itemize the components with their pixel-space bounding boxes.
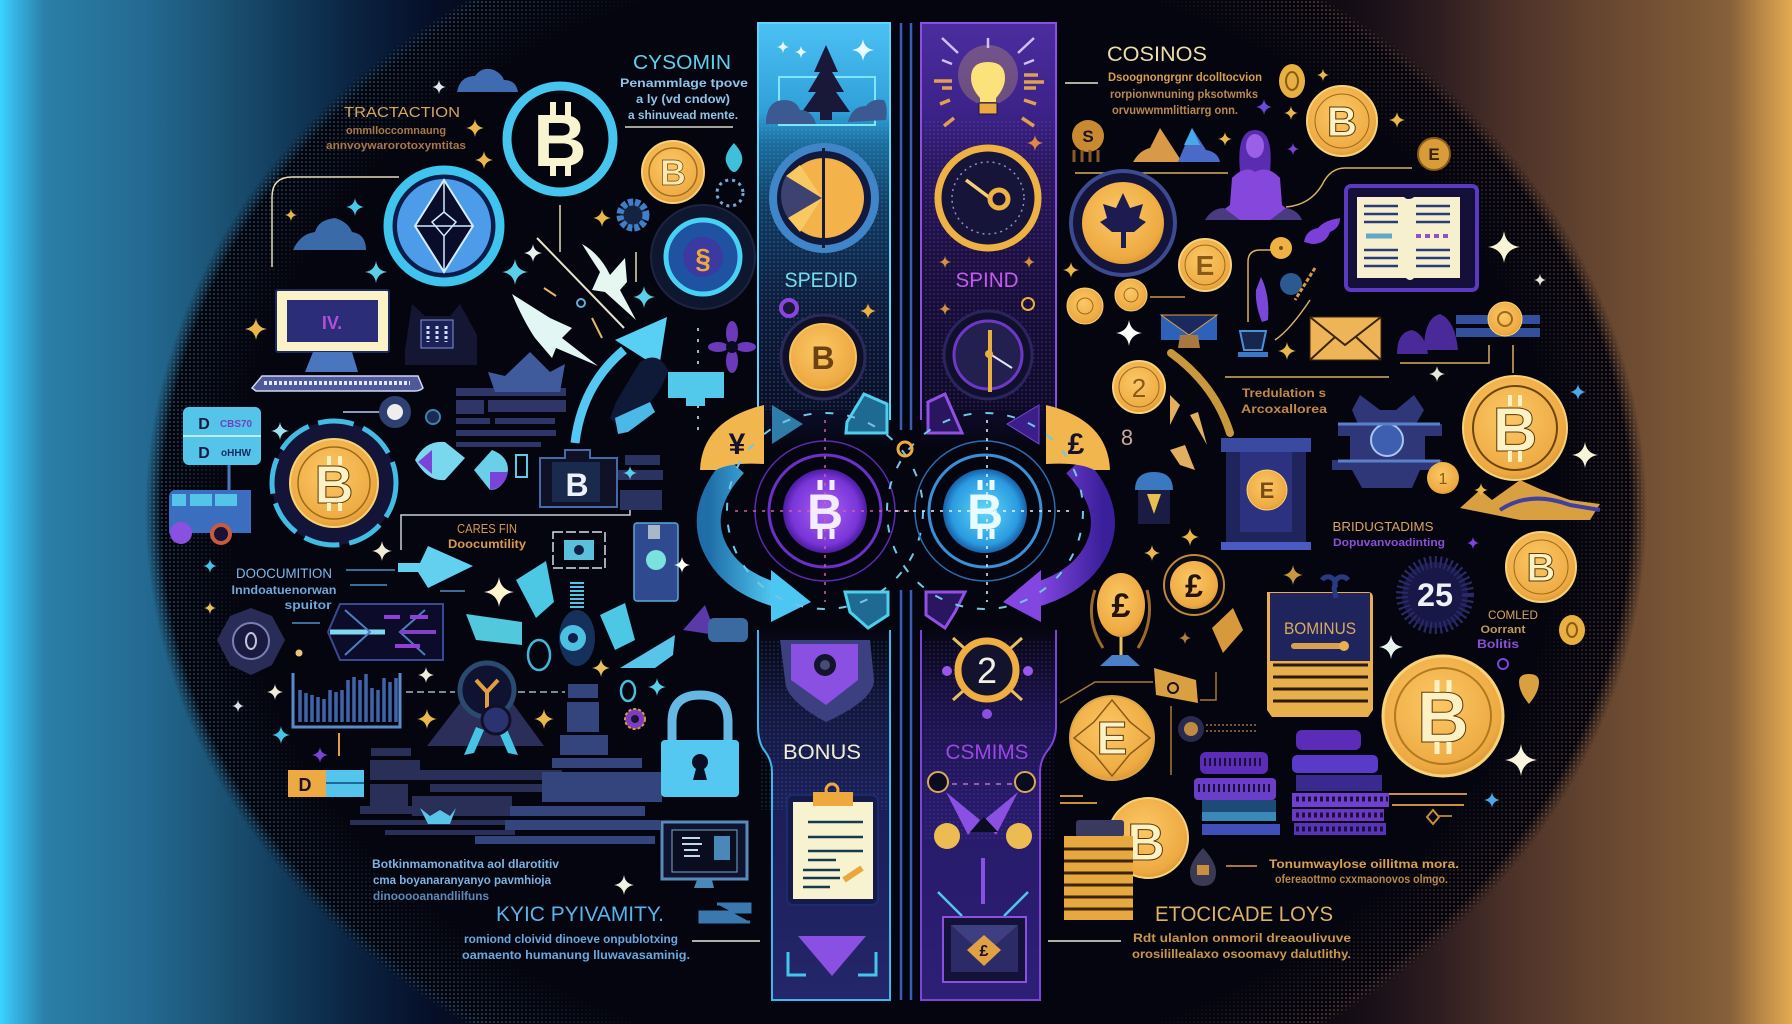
icon: purple shield [780, 640, 874, 722]
big curved arrow: cyan [709, 465, 811, 622]
icon: desktop computer [252, 290, 423, 391]
heading: DOCUMENTATION: spuitor [284, 598, 332, 612]
heading: COSINOS: rorpionwnuning pksotwmks [1110, 87, 1258, 101]
icon: badge 25 [1402, 562, 1468, 628]
icon: key [1427, 810, 1452, 824]
gold tab left [700, 405, 764, 470]
icon: coin [1179, 239, 1231, 291]
icon: circuit box [328, 604, 443, 660]
icon: banner [466, 614, 522, 645]
icon: ringed bitcoin coin: B [314, 455, 354, 515]
icon: brick wall [456, 352, 566, 447]
sparkles: left side [203, 80, 690, 895]
icon: purple cloud [1304, 218, 1340, 244]
icon: bonus card: BOMINUS [1284, 619, 1356, 638]
icon: pie chart dial [773, 147, 875, 249]
icon: jet [398, 546, 473, 588]
icon: purple blocks [683, 605, 748, 642]
device shape with clip [610, 358, 668, 434]
icon: small euro coin [1418, 138, 1450, 170]
icon: cyan shield bottom [845, 592, 888, 628]
icon: gold coin right [1506, 532, 1576, 602]
icon: framed device [405, 304, 477, 365]
heading: CYSOMIN: Penammlage tpove [620, 76, 748, 90]
icon: big bitcoin coin right [1463, 376, 1567, 480]
icon: ticket [516, 561, 554, 618]
text block: middle right [1241, 386, 1327, 416]
digit 8: 8 [1121, 425, 1133, 450]
icon: purple person [1205, 130, 1302, 220]
heading: DOCUMENTATION: Inndoatuenorwan [232, 583, 336, 597]
rule lines right [1060, 794, 1467, 805]
icon: blue envelope [1161, 315, 1217, 348]
icon: purple coin stack left [1194, 752, 1280, 835]
blocks: dark stepped stacks [350, 684, 662, 844]
heading: COSINOS: COSINOS [1107, 43, 1207, 66]
hub: purple bitcoin: B [807, 484, 843, 540]
icon: data card [183, 407, 261, 490]
block stack [618, 455, 663, 510]
icon: gold coin [781, 315, 865, 399]
icon: paper plane [620, 635, 675, 668]
small badge icons [621, 681, 645, 729]
icon: small euro coin: E [1428, 145, 1440, 164]
icon: small dial [426, 410, 440, 424]
icon: machine with coin [1221, 438, 1311, 550]
hub: cyan bitcoin: B [967, 484, 1003, 540]
icon: clipboard [787, 784, 878, 905]
icon: gold coin top [642, 141, 704, 203]
icon: gold badge number 2: 2 [977, 650, 997, 691]
icon: bitcoin ring [507, 86, 613, 192]
icon: purple down triangle [788, 936, 876, 976]
icon: moon coin [1072, 120, 1104, 162]
big cyan arrow [575, 317, 667, 443]
icon: small computer [662, 822, 750, 922]
icon: data card: D [198, 445, 210, 462]
chart: bar chart [293, 673, 400, 727]
icon: mountains [1133, 128, 1220, 162]
text block: COMLED: COMLED [1488, 608, 1538, 622]
heading: CYSOMIN [620, 52, 748, 127]
connector lines lower right [1060, 672, 1216, 775]
icon: purple ring and star [781, 300, 876, 319]
lines and bolts [537, 205, 636, 338]
rail text: BRIDUGTADIMS: BRIDUGTADIMS [1332, 519, 1434, 534]
text block: COMLED: Bolitis [1477, 637, 1519, 651]
icon: knob [383, 400, 407, 424]
heading: TRACTACTION: TRACTACTION [344, 104, 460, 121]
icon: moon coin: S [1082, 127, 1094, 146]
label: CSMIMS: CSMIMS [946, 741, 1028, 764]
icon: small coin node [1270, 237, 1292, 259]
big curved arrow: purple [1003, 465, 1103, 622]
icon: coin 2 [1113, 361, 1165, 413]
icon: pound coin on stand: £ [1112, 587, 1131, 625]
icon: droplet [726, 143, 742, 172]
text block: right body: Tonumwaylose oillitma mora. [1269, 857, 1459, 871]
icon: purple hats [1397, 314, 1458, 354]
heading: CARES: CARES FIN [457, 521, 517, 536]
gold tab right [1046, 405, 1110, 470]
dashes [697, 328, 699, 430]
icon: small monitor [1238, 331, 1268, 357]
icon: gold flag [1154, 668, 1198, 703]
rocket: upper [582, 244, 636, 320]
icon: machine with coin: E [1260, 478, 1274, 503]
icon: coin pair [1067, 279, 1185, 324]
text block: KYC lines: oamaento humanung lluwavasaminig. [462, 948, 690, 962]
gold tab right: £ [1068, 428, 1085, 461]
icon: coin: E [1196, 250, 1214, 281]
text block: left body: Botkinmamonatitva aol dlarotitiv [372, 857, 559, 871]
icon: coin behind stack [1108, 798, 1188, 878]
text block: left body [372, 857, 559, 903]
heading: CARES: Doocumtility [448, 537, 526, 551]
triangle right [1007, 405, 1039, 444]
icon: cyan glowing disc: § [695, 243, 711, 274]
heading: TRACTACTION [326, 104, 466, 152]
rail text: BRIDUGTADIMS: Dopuvanvoadinting [1333, 537, 1445, 549]
heading: KYIC PYIVAMITY: KYIC PYIVAMITY. [496, 903, 664, 926]
icon: coin 2: 2 [1132, 373, 1146, 403]
text block: right body [1269, 857, 1459, 886]
icon: lamp [559, 582, 595, 666]
connector lines right [1075, 168, 1513, 377]
text block: COMLED: Oorrant [1480, 624, 1526, 636]
icon: big bitcoin coin right: B [1493, 396, 1537, 465]
icon: gold pin [1519, 674, 1539, 704]
icon: gold ticket [1212, 608, 1243, 653]
text block: COMLED [1477, 608, 1538, 651]
icon: gold coin right: B [1527, 546, 1555, 590]
icon: open book [1346, 186, 1477, 290]
icon: ticket right [600, 603, 635, 650]
icon: top cloud [457, 69, 518, 92]
text block: KYC lines: romiond cloivid dinoeve onpublotxing [464, 932, 678, 946]
icon: bitcoin ring: B [533, 99, 587, 182]
label: SPIND: SPIND [956, 269, 1018, 292]
icon: largest bitcoin coin: B [1417, 678, 1469, 758]
small ring [528, 640, 550, 670]
text block: left body: cma boyanaranyanyo pavmhioja [373, 873, 551, 887]
small gold accent dots [296, 650, 339, 756]
icon: light bulb and rays [934, 38, 1044, 151]
label: SPEDID: SPEDID [784, 269, 858, 292]
icon: connector wings [928, 772, 1035, 916]
icon: purple coin stack right [1292, 730, 1389, 835]
curved gold arc [1171, 353, 1230, 433]
icon: badge 25: 25 [1417, 577, 1453, 613]
icon: gear [620, 202, 646, 228]
icon: gold coin stack [1064, 820, 1133, 920]
icon: small coin eye [1559, 615, 1585, 645]
icon: purple shield top [928, 394, 962, 433]
icon: purple shield bottom [926, 592, 965, 628]
triangle left [772, 405, 803, 444]
icon: maple coin [1071, 171, 1175, 275]
text block: middle right: Tredulation s [1242, 386, 1326, 400]
hub: cyan bitcoin [887, 413, 1083, 609]
white rule right [1048, 940, 1121, 942]
heading: COSINOS: orvuwwmmlittiarrg onn. [1112, 103, 1238, 117]
icon: clock [944, 311, 1032, 399]
icon: data card: oHHW [221, 448, 252, 459]
icon: data card: CBS70 [220, 419, 252, 430]
icon: envelope with gold diamond [943, 917, 1026, 982]
icon: gauge dial [938, 148, 1038, 248]
icons: bird shapes [415, 442, 527, 490]
left scene: tree and clouds [766, 39, 887, 125]
dashed line [406, 691, 565, 693]
icon: B box [540, 450, 617, 507]
heading: COSINOS: Dsoognongrgnr dcolltocvion [1108, 70, 1262, 84]
icon: medal with ribbon [427, 663, 544, 755]
icon: ringed bitcoin coin [272, 412, 396, 545]
text block: left body: dinooooanandlilfuns [373, 889, 489, 903]
heading: CARES [448, 521, 526, 551]
icon: data card: D [198, 416, 210, 433]
icon: pound coin: £ [1185, 568, 1203, 604]
heading: COSINOS [1065, 43, 1262, 117]
connector lines [292, 570, 465, 623]
icon: gold coin top right: B [1327, 98, 1357, 145]
icon: largest bitcoin coin [1383, 656, 1503, 776]
text block: ETOCICADE lines [1132, 931, 1351, 961]
icon: cyan connector box [668, 372, 724, 406]
heading: DOCUMENTATION [232, 565, 336, 612]
icon: E coin: E [1097, 712, 1127, 764]
icon: mountain chart [1460, 480, 1600, 520]
icon: small coin: 1 [1439, 471, 1448, 488]
rocket: lower [512, 294, 598, 366]
divider lines [901, 23, 911, 1000]
icon: small gold ring centre [898, 442, 912, 456]
icon: vehicle [169, 490, 251, 544]
icon: pound coin on stand [1091, 573, 1150, 666]
label: BONUS: BONUS [783, 741, 861, 764]
rail text: BRIDUGTADIMS [1332, 519, 1445, 549]
icon: ethereum disc [388, 170, 500, 282]
sparkles: right side [1063, 69, 1598, 808]
icon: small coin top [1279, 64, 1305, 98]
icon: bonus card [1267, 577, 1373, 717]
icon: purple flower [708, 321, 756, 373]
icon: cyan glowing disc [651, 205, 755, 309]
panel: left column [758, 23, 890, 1000]
icon: coin behind stack: B [1127, 814, 1165, 872]
icon: desktop computer: IV. [322, 313, 342, 333]
small arrows gold [1170, 395, 1207, 470]
heading: CYSOMIN: CYSOMIN [633, 52, 731, 74]
heading: TRACTACTION: ommlloccomnaung [346, 125, 446, 137]
text block: right body: ofereaottmo cxxmaonovos olmgo. [1275, 872, 1448, 886]
hub: purple bitcoin [727, 413, 923, 609]
text block: KYC lines [462, 932, 690, 962]
heading: ETOCICADE LOYS: ETOCICADE LOYS [1155, 903, 1333, 926]
text block: ETOCICADE lines: orosilillealaxo osoomavy dalutlithy. [1132, 947, 1351, 961]
icon: D tag: D [298, 775, 312, 795]
gold tab left: ¥ [729, 428, 746, 461]
icon: dotted ring [717, 180, 743, 206]
heading: CYSOMIN: a ly (vd cndow) [636, 92, 730, 106]
frame line [401, 510, 630, 550]
icon: device top [553, 532, 605, 568]
icon: gold coin: B [811, 340, 835, 376]
heading: CYSOMIN: a shinuvead mente. [628, 108, 738, 122]
icon: cyan shield top [846, 394, 887, 433]
icon: gold coin top: B [660, 152, 686, 193]
icon: lantern [1135, 472, 1173, 524]
panel: right column [921, 23, 1056, 1000]
icon: padlock [661, 695, 739, 797]
icon: gold badge number 2 [942, 638, 1033, 719]
icon: drop and orb [1256, 268, 1315, 322]
heading: TRACTACTION: annvoywarorotoxymtitas [326, 140, 466, 152]
icon: gold coin top right [1307, 86, 1377, 156]
icon: B box: B [565, 467, 589, 503]
white rule left [692, 940, 760, 942]
icon: cloud [293, 218, 366, 250]
text block: middle right: Arcoxallorea [1241, 402, 1327, 416]
icon: gold drop [1190, 848, 1257, 886]
heading: DOCUMENTATION: DOOCUMITION [236, 565, 332, 581]
icon: dark gear [217, 608, 285, 675]
icon: sparkle and ring [939, 256, 1035, 315]
icon: envelope with gold diamond: £ [980, 943, 989, 960]
connector line [272, 177, 399, 267]
icon: pound coin [1164, 555, 1224, 615]
text block: ETOCICADE lines: Rdt ulanlon onmoril dreaoulivuve [1133, 931, 1351, 945]
icon: D tag [288, 770, 364, 797]
icon: E coin [1070, 696, 1154, 780]
icon: small coin [1427, 462, 1459, 494]
icon: gold envelope [1310, 317, 1381, 360]
icon: bar chain with coin [1456, 302, 1540, 337]
icon: small coin with line [1178, 716, 1258, 742]
icon: phone [634, 523, 678, 601]
icon: purple ring [1498, 659, 1508, 669]
icon: gear machine [1332, 395, 1442, 488]
